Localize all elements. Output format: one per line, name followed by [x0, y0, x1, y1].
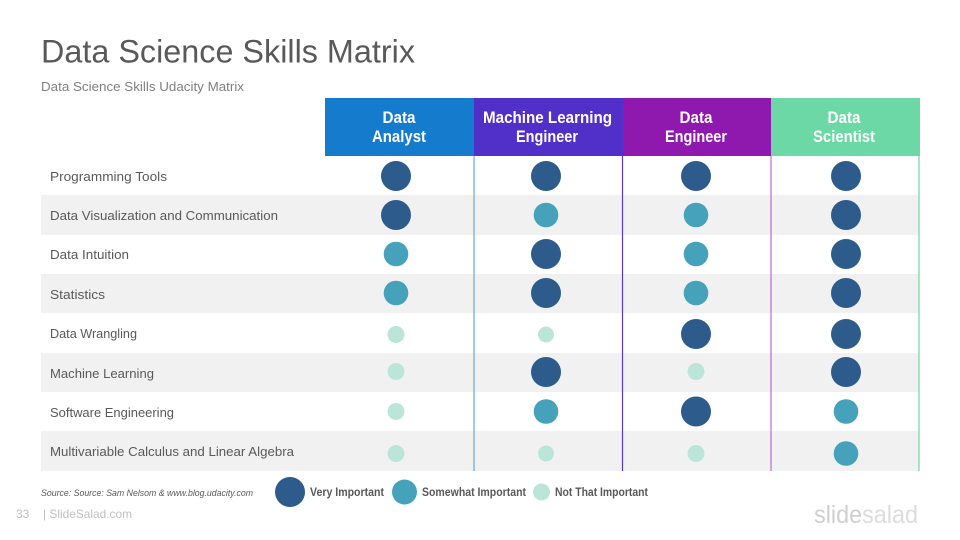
- header: Machine Learning Engineer: Machine Learning: [483, 109, 612, 127]
- row: Machine Learning: Machine Learning: [50, 367, 154, 381]
- header: Data Scientist: Data: [828, 109, 861, 127]
- footer site name: | SlideSalad.com: [43, 507, 132, 521]
- header: Data Scientist: Scientist: [813, 128, 875, 146]
- legend: somewhat important: Somewhat Important: [422, 487, 526, 499]
- row: Multivariable Calculus and Linear Algebra: Multivariable Calculus and Linear Algebra: [50, 445, 294, 459]
- legend: very important: [275, 477, 384, 507]
- row: Software Engineering: Software Engineering: [50, 406, 174, 420]
- header: Machine Learning Engineer: [474, 98, 623, 156]
- legend: not that important: [533, 484, 648, 500]
- legend: somewhat important: [392, 480, 526, 504]
- row: Data Visualization and Communication: Data Visualization and Communication: [50, 209, 278, 223]
- row: Statistics: [50, 278, 861, 308]
- row: Data Wrangling: [50, 319, 861, 349]
- subtitle: Data Science Skills Udacity Matrix: [41, 80, 245, 94]
- row: Programming Tools: Programming Tools: [50, 170, 167, 184]
- logo wordmark: slidesalad: [814, 501, 918, 529]
- legend: [275, 477, 648, 507]
- header: Data Analyst: [325, 98, 474, 156]
- header: Machine Learning Engineer: Engineer: [516, 128, 579, 146]
- row: Data Intuition: Data Intuition: [50, 248, 129, 262]
- row: Statistics: Statistics: [50, 288, 105, 302]
- row: Programming Tools: [50, 161, 861, 191]
- header: Data Engineer: Engineer: [665, 128, 728, 146]
- row: Multivariable Calculus and Linear Algebra: [50, 441, 858, 466]
- header: Data Analyst: Analyst: [372, 128, 426, 146]
- header: Data Scientist: [771, 98, 920, 156]
- source note: Source: Source: Sam Nelsom & www.blog.udacity.com: [41, 488, 253, 499]
- legend: not that important: Not That Important: [555, 487, 648, 499]
- row: Data Visualization and Communication: [50, 200, 861, 230]
- row: Data Wrangling: Data Wrangling: [50, 327, 137, 341]
- row: Software Engineering: [50, 396, 858, 426]
- header: Data Analyst: Data: [382, 109, 416, 127]
- title: Data Science Skills Matrix: [41, 34, 415, 70]
- row: Machine Learning: [50, 357, 861, 387]
- header: Data Engineer: Data: [680, 109, 713, 127]
- header: Data Engineer: [623, 98, 771, 156]
- page number: 33: [16, 507, 30, 521]
- row backgrounds: [41, 195, 919, 471]
- row: Data Intuition: [50, 239, 861, 269]
- legend: very important: Very Important: [310, 487, 384, 499]
- column dividers: [474, 156, 919, 471]
